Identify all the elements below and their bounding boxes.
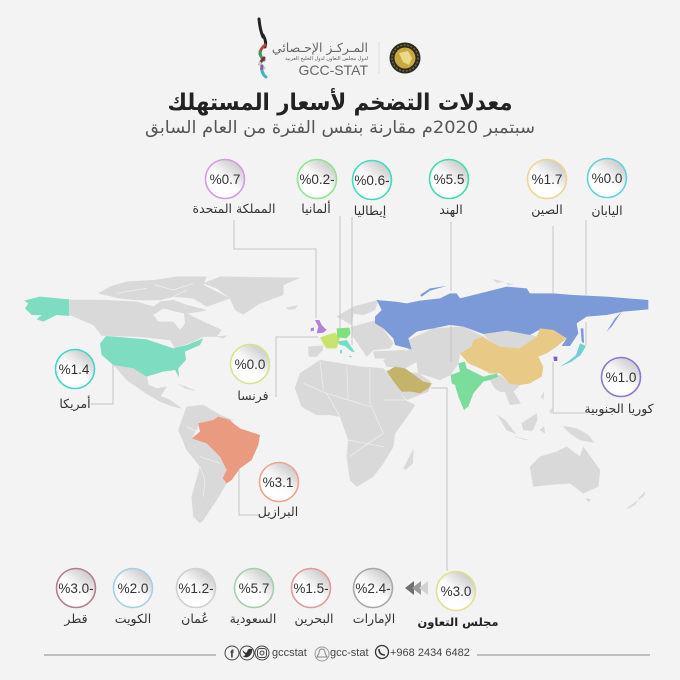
country: USA <box>24 297 69 322</box>
footer contacts <box>44 646 650 661</box>
GCC row <box>56 568 499 630</box>
map: Americas <box>24 297 260 523</box>
callout: Oman <box>176 568 216 626</box>
callout: France: فرنسا <box>237 388 269 404</box>
callout: USA: أمريكا <box>59 395 91 412</box>
title: معدلات التضخم لأسعار المستهلك <box>168 87 512 116</box>
country: South Korea <box>553 357 557 361</box>
icon: facebook <box>225 646 239 660</box>
callout: South Korea: كوريا الجنوبية <box>584 401 654 417</box>
map: Western Europe <box>311 320 355 358</box>
callout: France <box>230 344 270 404</box>
callout: USA <box>56 350 94 412</box>
callout: Brazil: %3.1 <box>263 475 293 490</box>
handle: gccstat: gccstat <box>272 647 307 659</box>
callout: Bahrain: %1.5- <box>293 581 329 596</box>
country: India <box>451 362 498 410</box>
callout: United Kingdom <box>193 160 275 216</box>
world map <box>24 277 648 523</box>
icon: snapchat <box>315 647 329 661</box>
callout: Kuwait <box>114 568 152 627</box>
callout: France: %0.0 <box>235 357 265 372</box>
callout: Italy: إيطاليا <box>354 203 386 218</box>
callout: China: الصين <box>531 202 563 218</box>
subtitle: سبتمبر 2020م مقارنة بنفس الفترة من العام السابق <box>145 118 535 138</box>
country: Brazil <box>192 417 260 483</box>
icon: GCC emblem <box>390 42 420 74</box>
handle: gcc-stat: gcc-stat <box>330 647 369 659</box>
callout: Qatar: قطر <box>63 611 88 627</box>
icon: facebook: f <box>230 648 234 660</box>
logo wordmark <box>272 40 368 78</box>
callout: Germany: ألمانيا <box>301 200 331 216</box>
callout: UAE: %2.4- <box>355 581 391 596</box>
callout: Kuwait: الكويت <box>115 611 151 627</box>
callout: GCC <box>417 572 499 630</box>
callout: Italy: %0.6- <box>354 173 390 188</box>
logo wordmark: GCC-STAT <box>299 62 368 78</box>
callout: India: %5.5 <box>434 172 464 187</box>
map: North America north <box>70 277 300 348</box>
callout: India: الهند <box>439 202 463 218</box>
callout: Saudi Arabia: السعودية <box>230 611 276 627</box>
arrows: pointing to members <box>405 581 428 595</box>
callout: Japan: %0.0 <box>592 171 622 186</box>
leader lines <box>91 216 586 571</box>
logo: GCC-STAT <box>259 19 420 78</box>
callout: Saudi Arabia <box>230 568 276 627</box>
callout: Japan: اليابان <box>591 203 623 218</box>
country: United Kingdom <box>315 320 327 333</box>
callout: GCC: مجلس التعاون <box>417 615 499 630</box>
callout: South Korea: %1.0 <box>606 370 636 385</box>
country: Japan <box>560 343 586 367</box>
icon: instagram <box>255 646 269 660</box>
icon: ribbon <box>259 19 266 77</box>
callout: Brazil <box>258 462 298 520</box>
icon: whatsapp <box>376 646 388 658</box>
country: France <box>320 333 340 348</box>
map: Europe gray <box>308 300 407 358</box>
callout: GCC: %3.0 <box>441 584 471 599</box>
phone number: +968 2434 6482 <box>390 647 470 659</box>
callout: UAE <box>353 568 395 627</box>
callout: India <box>430 160 468 218</box>
callout: United Kingdom: المملكة المتحدة <box>193 201 275 216</box>
callout: China <box>528 160 566 218</box>
callout: Bahrain: البحرين <box>294 611 334 627</box>
callout: Kuwait: %2.0 <box>118 581 148 596</box>
callout: China: %1.7 <box>532 172 562 187</box>
callout: Germany <box>298 160 336 216</box>
callout: South Korea <box>584 358 654 417</box>
callout: Oman: %1.2- <box>178 581 214 596</box>
logo wordmark: المـركـز الإحـصائي <box>272 40 368 56</box>
logo wordmark: لدول مجلس التعاون لدول الخليج العربية <box>285 56 368 62</box>
callout: Bahrain <box>292 568 334 627</box>
country: China <box>460 328 567 385</box>
callout: Japan <box>588 158 626 218</box>
callout: UAE: الإمارات <box>353 611 395 627</box>
callout: Oman: عُمان <box>181 611 209 626</box>
country: Saudi Arabia <box>387 367 432 393</box>
callout: United Kingdom: %0.7 <box>210 172 240 187</box>
callout: Brazil: البرازيل <box>258 504 298 520</box>
callout: Qatar: %3.0- <box>58 581 94 596</box>
callout: Italy <box>352 160 392 218</box>
callout: Saudi Arabia: %5.7 <box>239 581 269 596</box>
callout: USA: %1.4 <box>59 362 90 377</box>
icon: twitter <box>240 646 254 660</box>
country: Russia <box>375 287 648 349</box>
callout: Germany: %0.2- <box>299 172 335 187</box>
map: Eurasia, Africa, Oceania <box>295 279 648 508</box>
country: Italy <box>337 340 355 352</box>
country: Germany <box>337 328 351 338</box>
callout: Qatar <box>56 568 96 627</box>
